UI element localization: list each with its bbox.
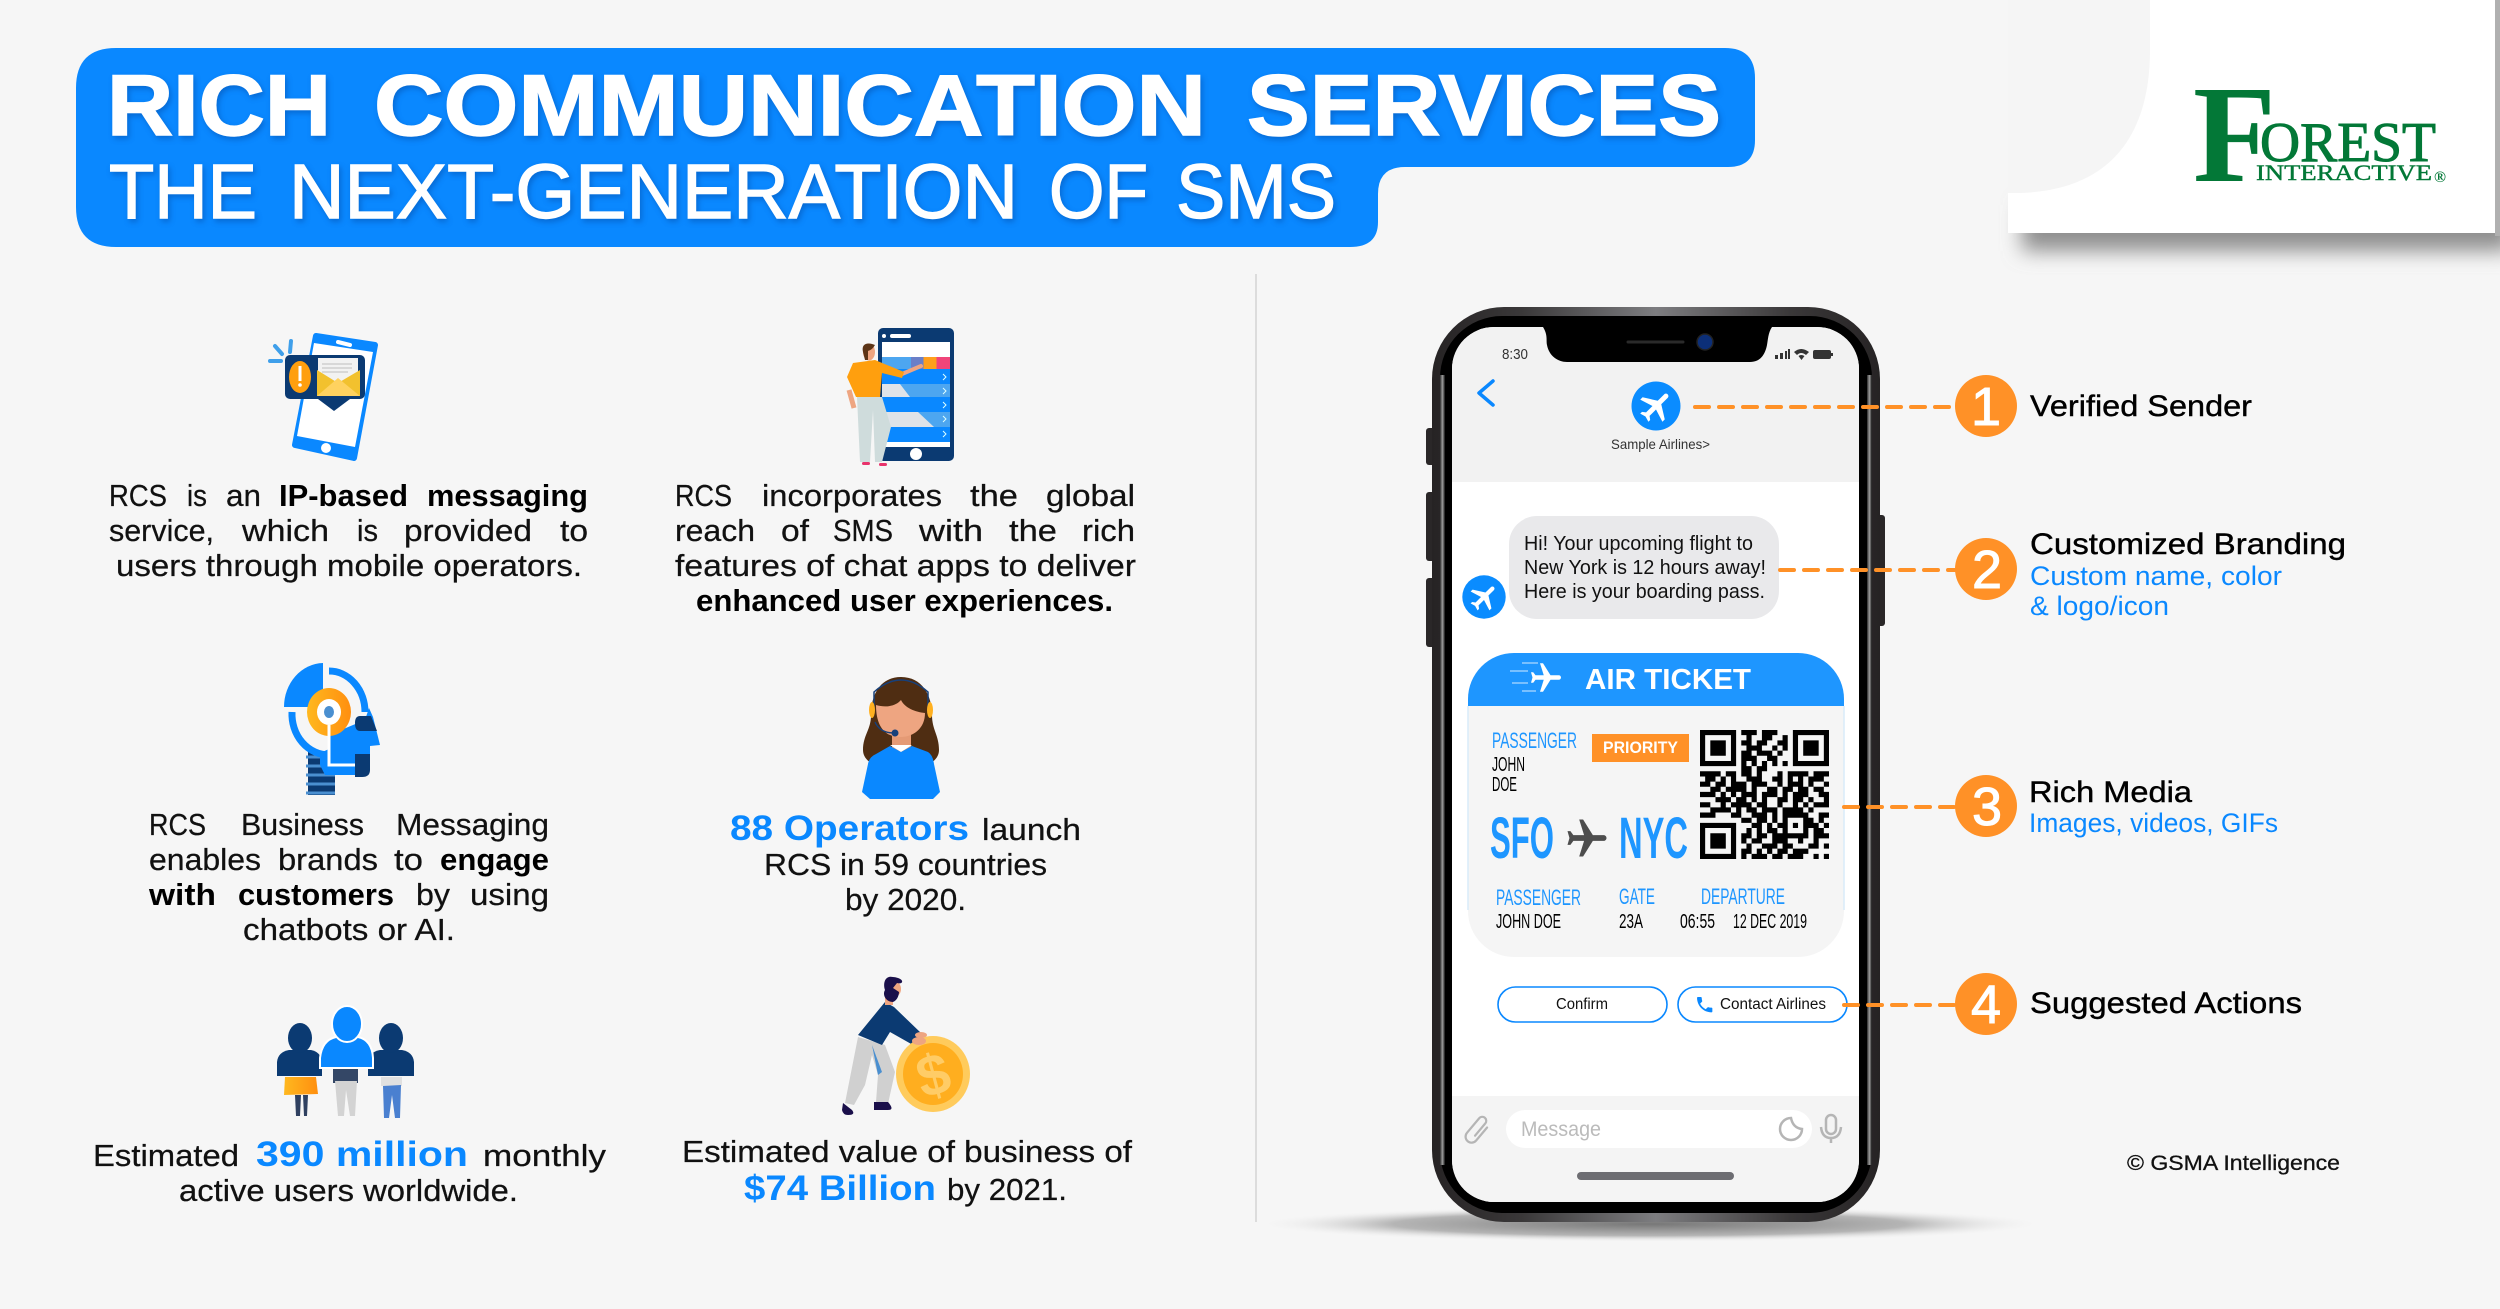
text: global reach: the — [1009, 513, 1057, 548]
title line 1: COMMUNICATION — [374, 58, 1206, 154]
verified sender avatar — [1632, 382, 1680, 430]
icon: tilted phone with mail notification — [270, 336, 375, 458]
side buttons — [1426, 428, 1885, 647]
callout 2: customized branding: Custom name, color — [2030, 561, 2282, 591]
ticket plane icon — [1510, 663, 1561, 692]
callout 4: suggested actions: 4 — [1971, 975, 2001, 1035]
text: global reach: with — [918, 513, 983, 548]
priority tag: PRIORITY — [1603, 738, 1679, 757]
title line 1: RICH — [107, 58, 331, 154]
text: IP-based messaging: is — [357, 513, 378, 548]
title line 1 — [107, 58, 1721, 154]
text: 390 million users: 390 million — [256, 1135, 468, 1174]
icon: microphone — [1821, 1115, 1841, 1143]
text: 88 operators — [730, 809, 1081, 917]
text: global reach: reach — [675, 513, 755, 548]
air ticket card: 23A — [1619, 911, 1643, 933]
text: IP-based messaging: RCS — [109, 478, 167, 513]
phone screen — [1452, 327, 1859, 1202]
text: 390 million users: active users worldwide. — [179, 1173, 518, 1208]
route SFO to NYC: NYC — [1619, 806, 1688, 871]
icon: sticker — [1780, 1118, 1802, 1140]
icon: AI head with headset — [284, 663, 380, 795]
title line 2: OF — [1049, 149, 1148, 235]
status bar — [1502, 347, 1833, 363]
callout 2: customized branding: 2 — [1972, 540, 2002, 600]
air ticket card: DEPARTURE — [1701, 884, 1785, 909]
text: 88 operators: by 2020. — [845, 882, 966, 917]
text: global reach: RCS — [675, 478, 732, 513]
text: IP-based messaging: is — [187, 478, 207, 513]
text: IP-based messaging — [109, 478, 588, 583]
route SFO to NYC — [1490, 806, 1688, 871]
callout 4: suggested actions: Suggested Actions — [2030, 987, 2302, 1020]
text: business messaging: by — [416, 877, 451, 912]
source credit: © GSMA Intelligence — [2127, 1152, 2340, 1175]
text: 74 billion value — [682, 1134, 1132, 1208]
text: global reach: global — [1046, 478, 1135, 513]
text: business messaging: enables — [149, 842, 261, 877]
QR code — [1700, 730, 1829, 859]
title line 1: SERVICES — [1247, 58, 1721, 154]
callout 3: rich media: 3 — [1972, 777, 2002, 837]
status bar: 8:30 — [1502, 347, 1528, 363]
air ticket card: 06:55 — [1680, 911, 1715, 933]
text: business messaging — [148, 807, 549, 947]
text: 88 operators: launch — [982, 812, 1081, 847]
icon: man pushing coin — [842, 977, 970, 1115]
button: contact airlines — [1678, 987, 1847, 1022]
text: 74 billion value: Estimated value of business of — [682, 1134, 1132, 1169]
icon: group of people — [277, 1006, 414, 1118]
text: business messaging: RCS — [149, 807, 206, 842]
callout 3: rich media: Images, videos, GIFs — [2029, 808, 2278, 838]
route SFO to NYC: SFO — [1490, 806, 1554, 871]
title line 2: THE — [109, 149, 257, 235]
priority tag — [1592, 734, 1689, 762]
text: IP-based messaging: provided — [404, 513, 532, 548]
logo panel — [2008, 0, 2500, 251]
title line 2: SMS — [1176, 149, 1336, 235]
phone shadow — [1255, 1206, 2045, 1242]
callout 2: customized branding: & logo/icon — [2030, 591, 2169, 621]
button: contact airlines: Contact Airlines — [1720, 996, 1826, 1013]
text: business messaging: customers — [238, 877, 394, 912]
phone mockup — [1426, 307, 1885, 1222]
logo: Forest Interactive: ® — [2434, 169, 2446, 186]
text: global reach: the — [970, 478, 1018, 513]
text: business messaging: using — [470, 877, 549, 912]
air ticket card: 12 DEC 2019 — [1733, 911, 1807, 933]
text: global reach: rich — [1082, 513, 1135, 548]
callout 3: rich media: Rich Media — [2029, 776, 2192, 809]
text: global reach: SMS — [833, 513, 893, 548]
message bubble: New York is 12 hours away! — [1524, 556, 1766, 579]
button: confirm — [1498, 987, 1667, 1022]
icon: paperclip — [1463, 1115, 1491, 1145]
text: global reach: features of chat apps to deliver — [675, 548, 1136, 583]
sender name: Sample Airlines> — [1611, 436, 1710, 452]
icon: man at large phone with list — [847, 328, 954, 466]
text: global reach: incorporates — [762, 478, 942, 513]
message input bar — [1463, 1110, 1841, 1148]
text: IP-based messaging: which — [241, 513, 329, 548]
message bubble: Here is your boarding pass. — [1524, 580, 1765, 603]
icon: man pushing coin: $ — [909, 1040, 957, 1111]
text: business messaging: Messaging — [396, 807, 549, 842]
home indicator — [1577, 1172, 1734, 1180]
logo: Forest Interactive: F — [2193, 58, 2276, 212]
callout 2: customized branding — [1955, 528, 2346, 621]
air ticket card — [1468, 653, 1844, 957]
button: confirm: Confirm — [1556, 996, 1608, 1013]
text: 74 billion value: $74 Billion — [744, 1169, 936, 1208]
text: IP-based messaging: users through mobile operators. — [116, 548, 582, 583]
text: 74 billion value: by 2021. — [947, 1172, 1067, 1207]
title banner — [76, 48, 1755, 247]
small avatar — [1462, 575, 1506, 619]
message bubble — [1509, 516, 1779, 619]
text: IP-based messaging: service, — [109, 513, 214, 548]
text: 88 operators: RCS in 59 countries — [764, 847, 1047, 882]
callout 4: suggested actions — [1955, 973, 2302, 1035]
text: IP-based messaging: an — [226, 478, 261, 513]
air ticket card: GATE — [1619, 884, 1655, 909]
callout 1: verified sender: 1 — [1971, 377, 2001, 437]
text: business messaging: brands — [278, 842, 378, 877]
text: IP-based messaging: to — [560, 513, 588, 548]
text: 390 million users: monthly — [483, 1138, 607, 1173]
air ticket card: DOE — [1492, 774, 1517, 796]
message bubble: Hi! Your upcoming flight to — [1524, 532, 1753, 555]
title line 2: NEXT-GENERATION — [289, 149, 1018, 235]
text: global reach: enhanced user experiences. — [696, 583, 1113, 618]
text: 390 million users: Estimated — [93, 1138, 239, 1173]
air ticket card: JOHN DOE — [1496, 911, 1561, 933]
logo: Forest Interactive — [2193, 58, 2446, 212]
dashed connectors — [1695, 407, 1955, 1005]
message input bar: Message — [1521, 1118, 1601, 1141]
text: business messaging: with — [148, 877, 216, 912]
text: 390 million users — [93, 1135, 607, 1208]
callout 1: verified sender — [1955, 375, 2252, 437]
callout 1: verified sender: Verified Sender — [2030, 390, 2252, 423]
text: business messaging: engage — [440, 842, 549, 877]
callout 2: customized branding: Customized Branding — [2030, 528, 2346, 561]
back arrow — [1479, 381, 1493, 405]
text: IP-based messaging: messaging — [427, 478, 588, 513]
title line 2 — [109, 149, 1336, 235]
air ticket card: JOHN — [1492, 754, 1525, 776]
text: global reach — [675, 478, 1136, 618]
air ticket card: PASSENGER — [1496, 885, 1581, 910]
logo: Forest Interactive: INTERACTIVE — [2256, 160, 2432, 185]
text: business messaging: chatbots or AI. — [243, 912, 455, 947]
air ticket card: AIR TICKET — [1585, 664, 1751, 696]
icon: call centre woman — [862, 677, 940, 799]
air ticket card: PASSENGER — [1492, 728, 1577, 753]
text: business messaging: to — [394, 842, 423, 877]
text: business messaging: Business — [241, 807, 364, 842]
callout 3: rich media — [1955, 775, 2278, 838]
text: IP-based messaging: IP-based — [279, 478, 408, 513]
text: 88 operators: 88 Operators — [730, 809, 969, 848]
logo: Forest Interactive: OREST — [2260, 112, 2436, 174]
text: global reach: of — [781, 513, 809, 548]
